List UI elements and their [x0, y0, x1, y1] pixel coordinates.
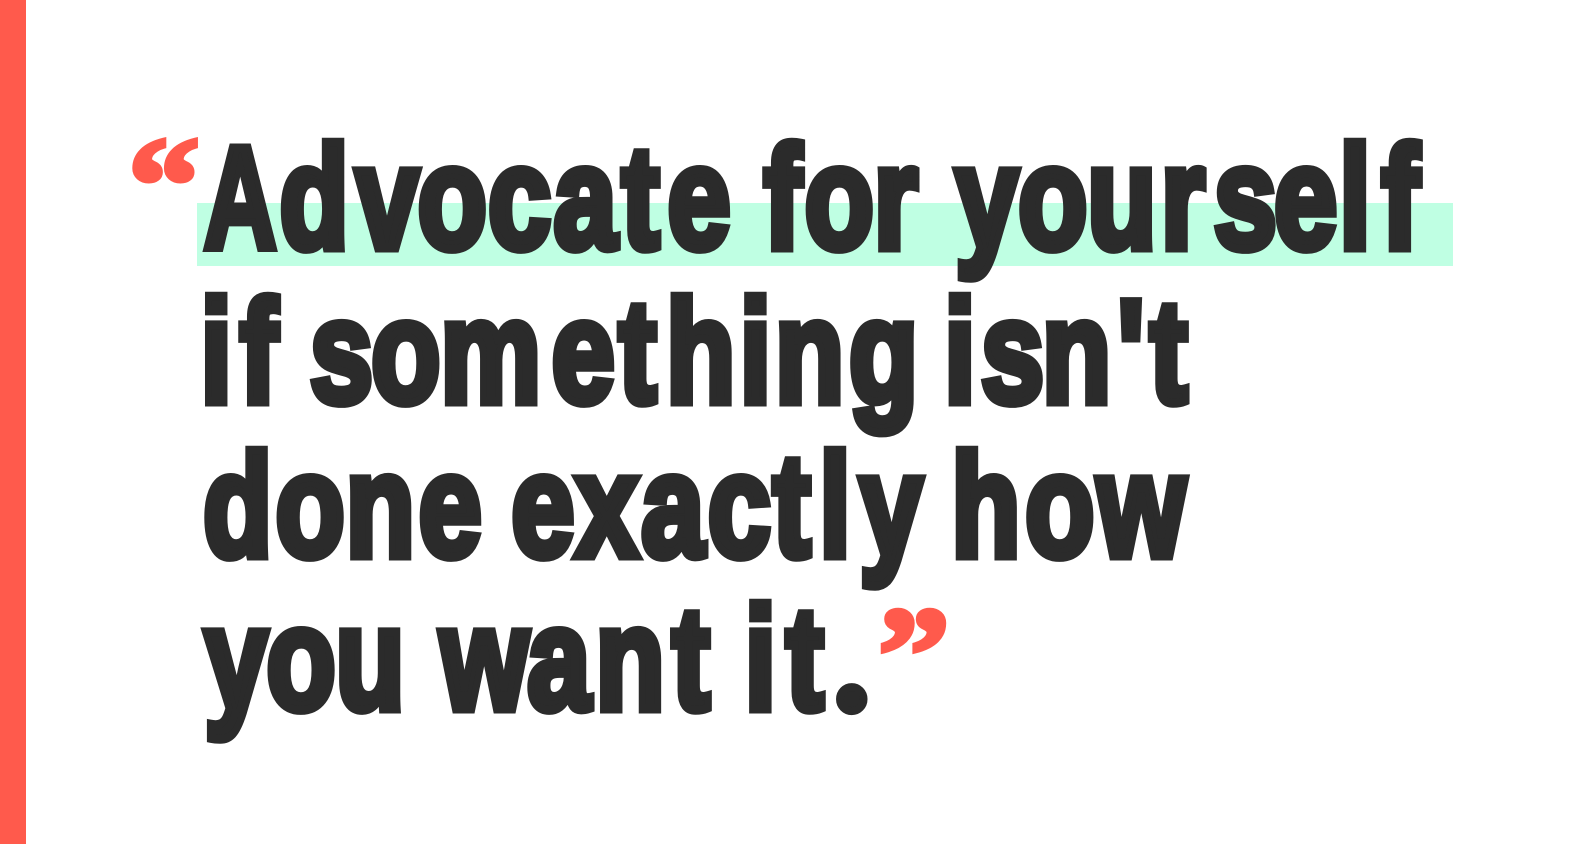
opening quotation mark: “: [128, 111, 200, 260]
highlight band: [197, 203, 1453, 266]
closing quotation mark: ”: [878, 581, 950, 730]
quote line 4: you want it.: [205, 577, 870, 741]
quote line 2: if something isn't: [201, 270, 1187, 433]
quote line 1: Advocate for yourself: [204, 116, 1420, 279]
quote line 3: done exactly how: [203, 424, 1186, 587]
left accent bar: [0, 0, 26, 844]
